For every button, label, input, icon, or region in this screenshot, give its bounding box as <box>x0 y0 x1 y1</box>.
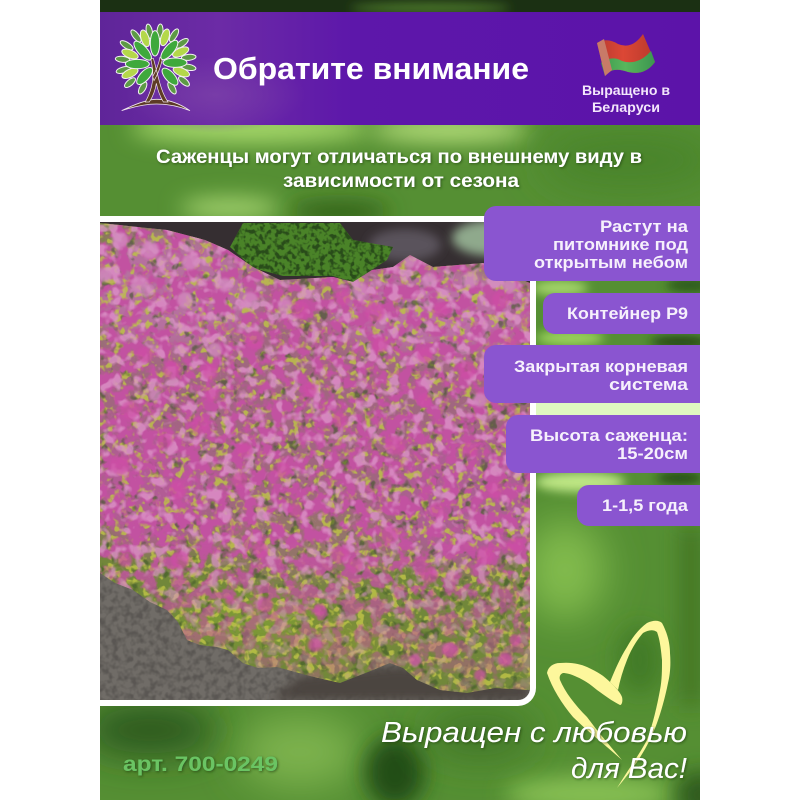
title: Обратите внимание <box>213 51 529 86</box>
panel: seedling height: 15-20см <box>617 445 688 463</box>
subtitle: Саженцы могут отличаться по внешнему виду в <box>156 147 642 168</box>
header band <box>100 12 700 133</box>
slogan: Выращен с любовью <box>381 717 687 749</box>
photo: flowering spiraea shrub <box>80 220 550 702</box>
icon: yellow heart <box>547 621 670 788</box>
label: grown in Belarus: Беларуси <box>592 100 660 115</box>
article number: арт. 700-0249 <box>123 753 278 776</box>
panel: grown outdoors: Растут на <box>600 218 689 236</box>
slogan <box>381 717 687 785</box>
panel: closed root system: система <box>609 376 689 394</box>
label: grown in Belarus: Выращено в <box>582 83 670 98</box>
conifer <box>225 222 397 284</box>
shrub mass <box>100 223 530 693</box>
ground and backdrop <box>100 222 530 283</box>
panel: closed root system: Закрытая корневая <box>514 358 688 376</box>
logo: tree <box>115 24 196 111</box>
panel: container: Контейнер Р9 <box>567 305 688 323</box>
panel: age <box>577 485 700 526</box>
flower and leaf texture <box>100 222 530 702</box>
panel: grown outdoors: питомнике под <box>553 236 689 254</box>
subtitle <box>156 147 642 192</box>
trunk <box>145 57 168 102</box>
label: grown in Belarus <box>582 83 670 115</box>
leaves <box>115 24 196 95</box>
panel: age: 1-1,5 года <box>602 497 689 515</box>
photo frame <box>100 216 536 706</box>
pale flower heads along the top <box>98 232 517 407</box>
panel: container <box>543 293 700 334</box>
flower clusters <box>110 290 527 681</box>
subtitle: зависимости от сезона <box>283 171 519 192</box>
panel: seedling height: Высота саженца: <box>530 427 688 445</box>
icon: flag of Belarus <box>597 34 655 76</box>
ground arcs <box>122 99 190 111</box>
panel: grown outdoors <box>484 206 700 281</box>
panel: grown outdoors: открытым небом <box>534 254 688 272</box>
slogan: для Вас! <box>571 753 687 785</box>
panel: closed root system <box>484 345 700 403</box>
panel: seedling height <box>506 415 700 473</box>
